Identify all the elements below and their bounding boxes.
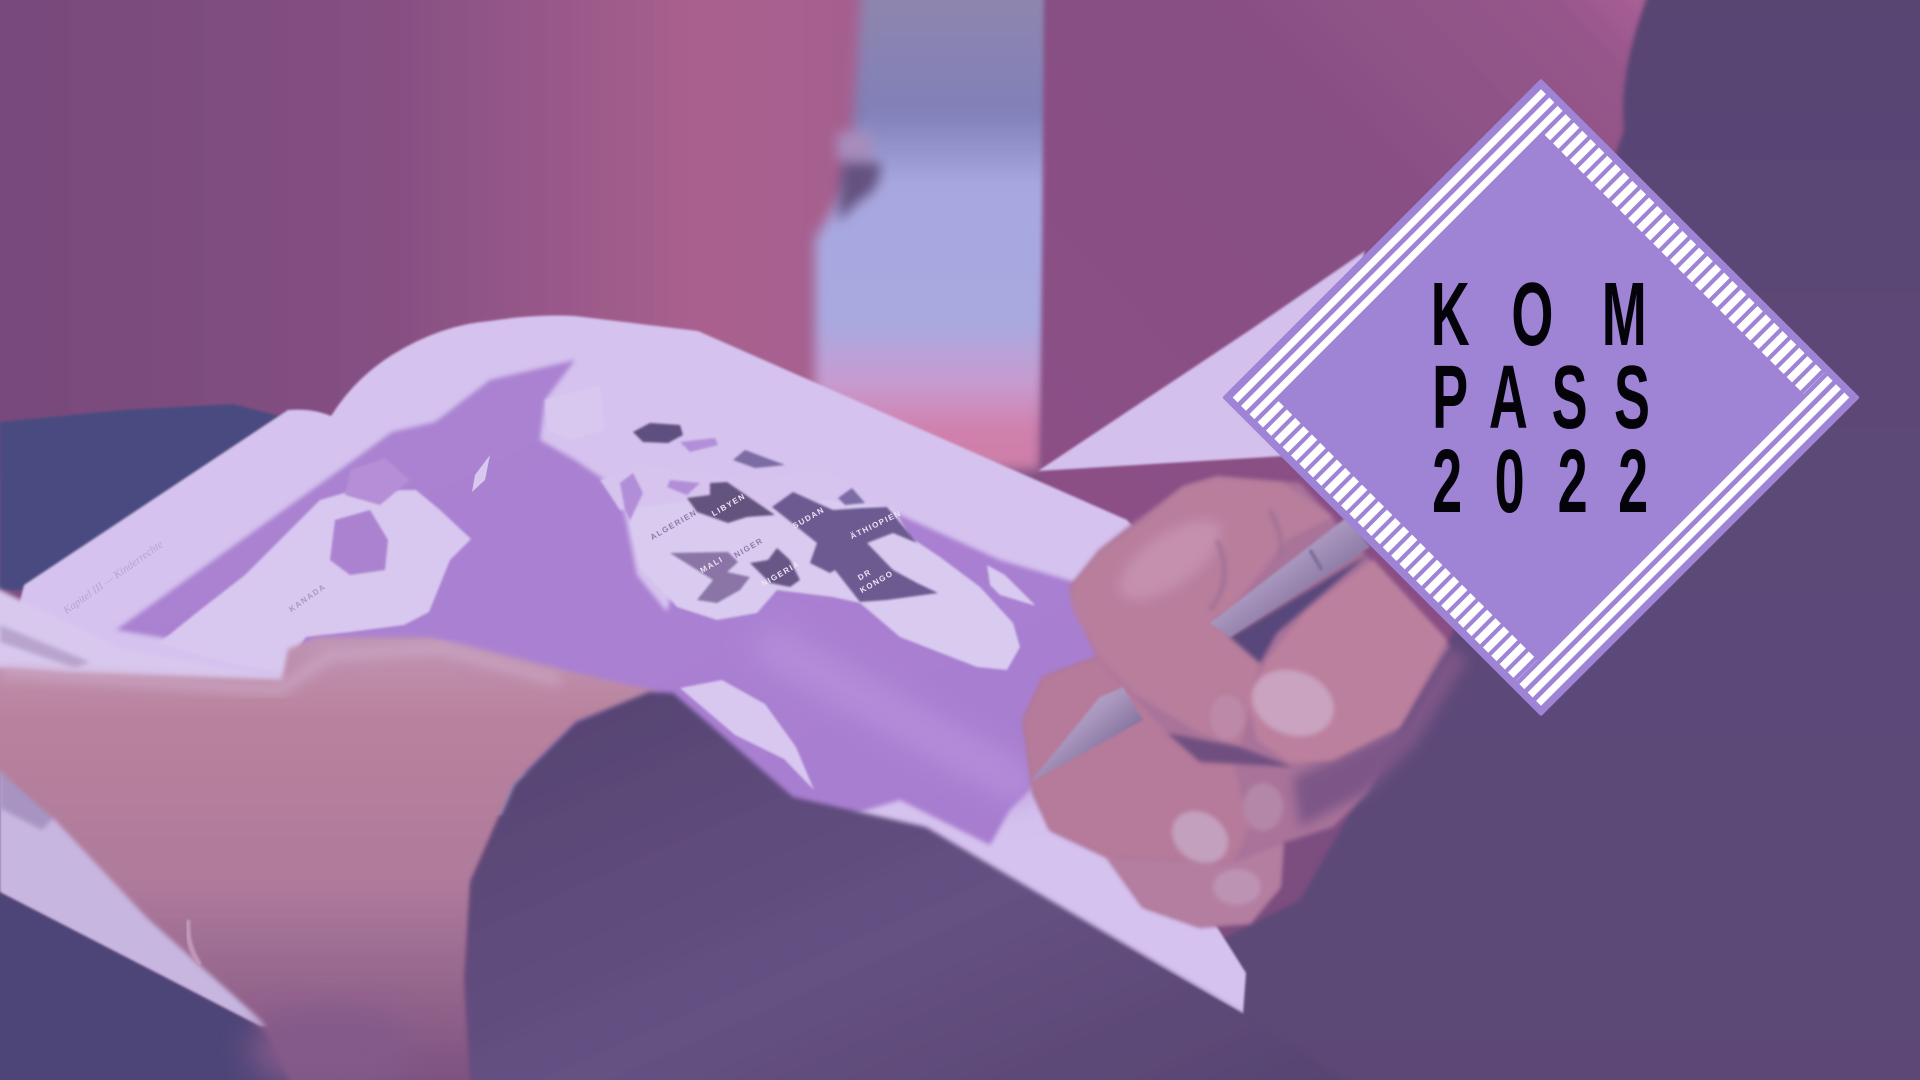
shadow between fingers xyxy=(1167,733,1293,767)
middle finger xyxy=(1023,657,1250,863)
South America land xyxy=(680,680,814,790)
atlas map labels: LIBYEN xyxy=(710,492,747,518)
atlas map labels: SUDAN xyxy=(791,505,826,531)
atlas map labels: KANADA xyxy=(287,582,328,614)
Europe land xyxy=(600,465,860,510)
open book pages xyxy=(0,316,1246,1014)
pen tip section xyxy=(1030,687,1143,782)
atlas map labels: DR xyxy=(856,567,873,582)
badge stripes xyxy=(1233,89,1849,706)
logo text: PASS xyxy=(1432,347,1650,447)
Mediterranean patches xyxy=(620,473,700,520)
dark country: Nigeria xyxy=(750,548,800,587)
pen barrel upper xyxy=(1210,517,1370,637)
atlas map labels: ÄTHIOPIEN xyxy=(849,508,903,541)
ring finger nail xyxy=(1243,783,1283,831)
logo text: 2022 xyxy=(1432,431,1648,531)
thumb nail xyxy=(1243,659,1343,747)
atlas map labels: NIGER xyxy=(732,536,765,560)
badge background xyxy=(1222,79,1860,716)
dark country: Yemen region xyxy=(838,488,865,505)
loose paper behind xyxy=(1038,251,1365,471)
logo text: KOM xyxy=(1431,264,1647,364)
page header text: Kapitel III — Kinderrechte xyxy=(60,538,166,617)
left hand xyxy=(0,637,660,1080)
dark jacket xyxy=(1000,0,1920,1080)
little finger nail xyxy=(1213,869,1261,905)
thumb xyxy=(1247,560,1447,763)
little finger xyxy=(1107,843,1283,927)
jeans lower left xyxy=(0,885,320,1080)
chair handle xyxy=(837,132,880,222)
palm shading xyxy=(1293,647,1467,827)
dark countries: Sudan, Ethiopia, DR Kongo xyxy=(772,492,938,602)
gutter highlight xyxy=(760,640,1030,790)
Africa map xyxy=(630,480,1020,670)
Arctic sea patches xyxy=(345,458,410,505)
dark country: Ukraine xyxy=(633,423,683,443)
hand highlight rim xyxy=(0,648,560,690)
Europe islands xyxy=(545,385,605,440)
Madagascar xyxy=(987,565,1035,605)
light gap between chairs xyxy=(815,0,1062,470)
index finger nail xyxy=(1210,695,1244,739)
logo text xyxy=(1431,264,1650,531)
Hudson Bay xyxy=(330,510,388,575)
atlas sea xyxy=(116,360,1135,860)
right red chair xyxy=(1040,0,1680,640)
atlas map labels: MALI xyxy=(699,555,725,575)
dark country: Libya xyxy=(687,482,775,523)
atlas map labels xyxy=(287,492,903,614)
atlas map labels: ALGERIEN xyxy=(649,508,699,542)
shadow under pen xyxy=(1230,553,1370,663)
pen xyxy=(1030,517,1370,782)
pen band xyxy=(1310,550,1322,570)
knuckle shading xyxy=(250,1010,410,1080)
sleeve xyxy=(465,692,1360,1080)
index finger xyxy=(1070,477,1333,747)
right hand xyxy=(1023,477,1467,927)
ring xyxy=(188,920,200,965)
book block under hand xyxy=(0,740,300,1030)
left red chair xyxy=(0,0,880,480)
atlas map labels: KONGO xyxy=(858,569,895,595)
dark country: Mali xyxy=(670,552,750,603)
print on lower sheet xyxy=(0,770,70,830)
lines of print on sheet xyxy=(0,625,90,668)
index finger highlight xyxy=(1106,504,1234,616)
logo badge: Kompass 2022 diamond xyxy=(1222,79,1860,716)
Black Sea xyxy=(680,438,718,452)
North America land xyxy=(159,490,471,673)
hand base xyxy=(1023,477,1450,927)
middle finger nail xyxy=(1162,800,1238,874)
top left sheet xyxy=(0,585,300,760)
finger crease xyxy=(1210,510,1281,610)
atlas map labels: NIGERIA xyxy=(760,559,802,589)
jeans knee xyxy=(0,404,280,590)
dark country: Iraq region xyxy=(733,450,785,468)
